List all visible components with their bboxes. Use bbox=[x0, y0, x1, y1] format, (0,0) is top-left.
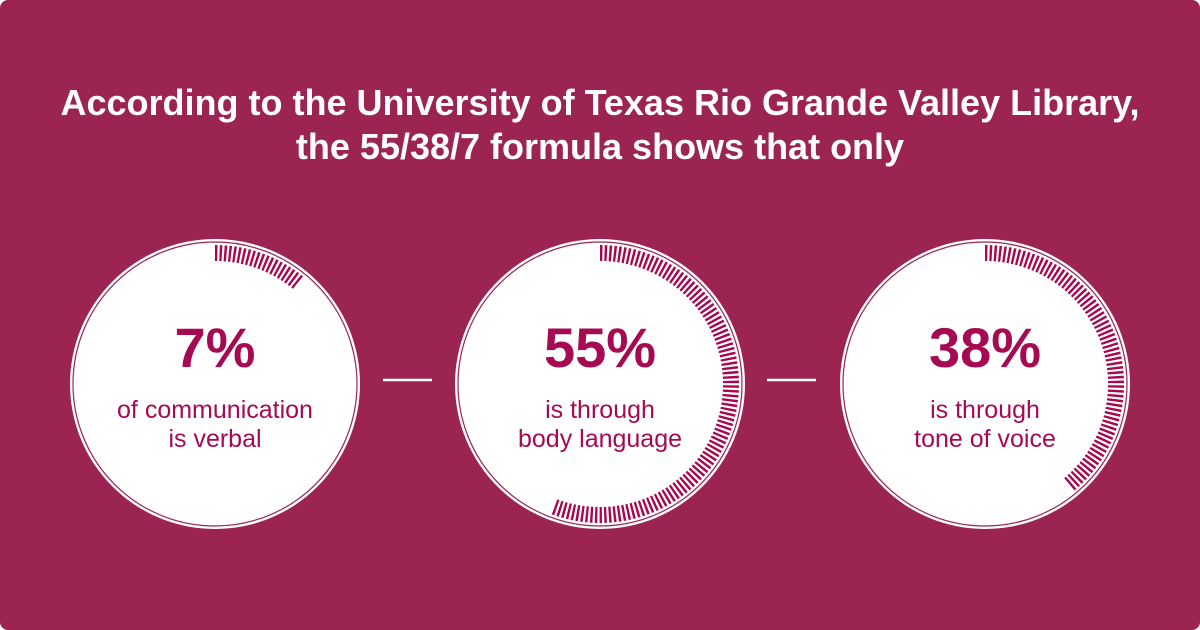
label tone of voice: is through bbox=[930, 396, 1040, 424]
label verbal: is verbal bbox=[168, 425, 262, 453]
connector dash 2 bbox=[767, 379, 816, 381]
tick arc 38% bbox=[985, 245, 1124, 490]
connector dash 1 bbox=[383, 379, 432, 381]
stat 38%: 38% bbox=[929, 316, 1041, 379]
title bbox=[61, 82, 1139, 167]
panel: 38% tone of voice bbox=[840, 239, 1130, 529]
tick arc 55% bbox=[552, 245, 739, 523]
panel: 7% verbal bbox=[70, 239, 360, 529]
stat 7%: 7% bbox=[175, 316, 255, 379]
label tone of voice: tone of voice bbox=[914, 425, 1056, 453]
title: According to the University of Texas Rio Grande Valley Library, bbox=[61, 82, 1139, 123]
label body language: body language bbox=[518, 425, 682, 453]
title: the 55/38/7 formula shows that only bbox=[296, 126, 904, 167]
tick arc 7% bbox=[215, 245, 303, 289]
stat 55%: 55% bbox=[544, 316, 656, 379]
panel: 55% body language bbox=[455, 239, 745, 529]
label body language: is through bbox=[545, 396, 655, 424]
label verbal: of communication bbox=[117, 396, 313, 424]
